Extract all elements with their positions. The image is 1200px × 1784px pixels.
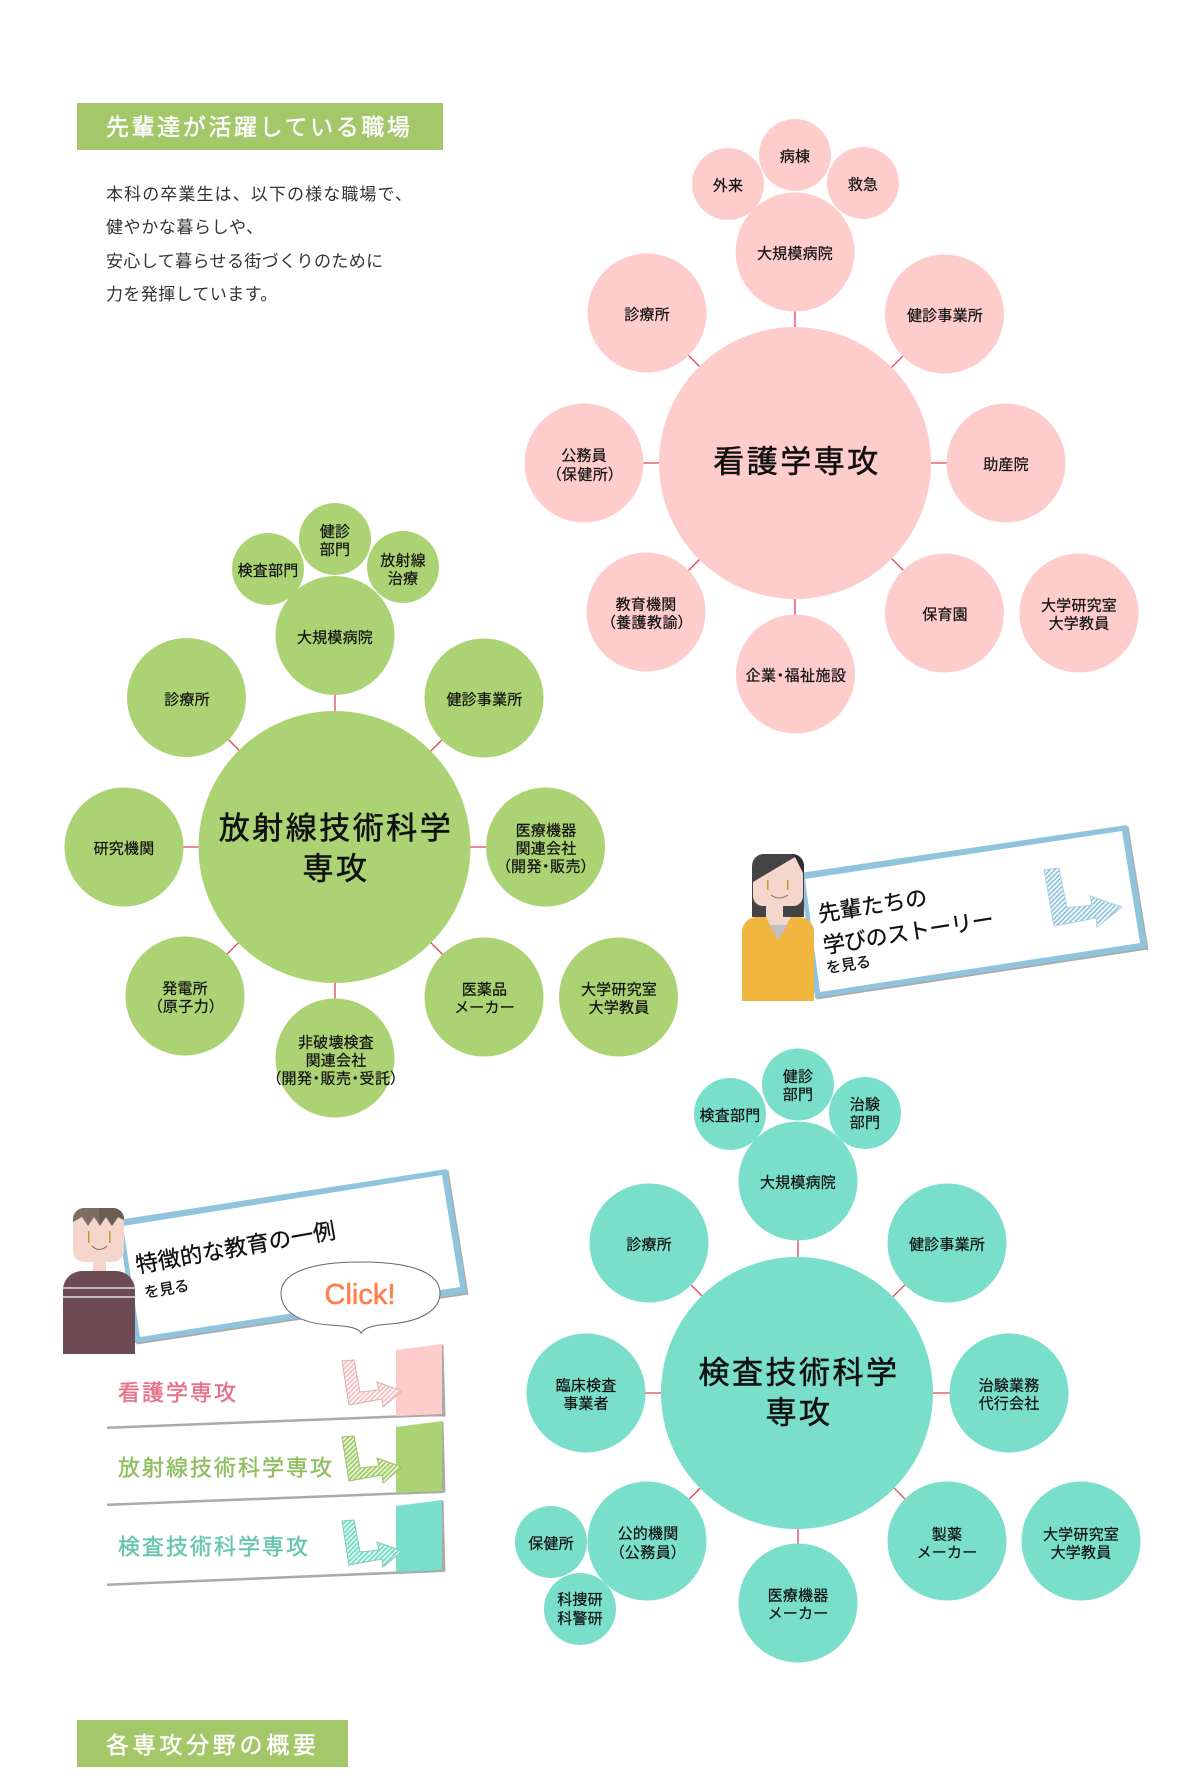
panel: 放射線技術科学専攻 diagram: 放射線技術科学: [219, 811, 453, 846]
callout: Click!: [281, 1262, 440, 1333]
panel: 看護学専攻 diagram: 看護学専攻: [713, 444, 881, 480]
panel: 検査技術科学専攻 diagram: 治験: [850, 1096, 880, 1114]
panel: 放射線技術科学専攻 diagram: 健診事業所: [446, 692, 523, 708]
panel: 看護学専攻 diagram: 公務員: [561, 448, 607, 464]
panel: 放射線技術科学専攻 diagram: 大学教員: [589, 1000, 649, 1016]
link row: 放射線技術科学専攻: [107, 1421, 446, 1506]
panel: 看護学専攻 diagram: 健診事業所: [907, 308, 983, 324]
text block: introduction: 力を発揮しています。: [106, 285, 278, 304]
text block: introduction: 安心して暮らせる街づくりのために: [106, 252, 384, 271]
panel: 検査技術科学専攻 diagram: [515, 1048, 1140, 1662]
heading: 先輩達が活躍している職場: 先輩達が活躍している職場: [106, 114, 413, 140]
link row: 看護学専攻: 看護学専攻: [118, 1380, 238, 1406]
panel: 放射線技術科学専攻 diagram: 非破壊検査: [298, 1034, 374, 1052]
heading: 先輩達が活躍している職場: [77, 103, 443, 150]
panel: 看護学専攻 diagram: 大学教員: [1049, 616, 1109, 632]
heading: 各専攻分野の概要: [77, 1720, 348, 1767]
panel: 検査技術科学専攻 diagram: 科警研: [557, 1610, 603, 1628]
text block: introduction: [106, 185, 413, 304]
panel: 検査技術科学専攻 diagram: 大規模病院: [760, 1174, 836, 1192]
text block: introduction: 本科の卒業生は、以下の様な職場で、: [106, 185, 413, 204]
panel: 検査技術科学専攻 diagram: メーカー: [768, 1606, 828, 1622]
panel: 看護学専攻 diagram: 教育機関: [616, 596, 676, 614]
panel: 放射線技術科学専攻 diagram: 部門: [320, 542, 350, 558]
panel: 検査技術科学専攻 diagram: 代行会社: [979, 1396, 1039, 1412]
panel: 検査技術科学専攻 diagram: 科捜研: [557, 1592, 603, 1608]
panel: 放射線技術科学専攻 diagram: 大学研究室: [581, 982, 657, 998]
panel: 看護学専攻 diagram: （養護教諭）: [608, 614, 686, 632]
panel: 放射線技術科学専攻 diagram: 検査部門: [238, 562, 298, 580]
card: 先輩たちの学びのストーリー: [800, 825, 1148, 1000]
icon: hatched arrow: [1044, 868, 1122, 927]
panel: 検査技術科学専攻 diagram: 臨床検査: [556, 1378, 616, 1394]
panel: 放射線技術科学専攻 diagram: 大規模病院: [297, 630, 373, 646]
panel: 検査技術科学専攻 diagram: メーカー: [917, 1544, 977, 1562]
icon: woman character: [742, 854, 814, 1001]
panel: 検査技術科学専攻 diagram: 検査技術科学: [698, 1356, 900, 1390]
panel: 看護学専攻 diagram: 診療所: [624, 306, 670, 324]
panel: 検査技術科学専攻 diagram: 保健所: [528, 1536, 574, 1552]
panel: 放射線技術科学専攻 diagram: （原子力）: [155, 998, 217, 1016]
link row: 検査技術科学専攻: [107, 1500, 446, 1586]
panel: 検査技術科学専攻 diagram: 公的機関: [618, 1526, 678, 1542]
panel: 検査技術科学専攻 diagram: 健診事業所: [909, 1236, 985, 1254]
card: 先輩たちの学びのストーリー: 先輩たちの: [816, 885, 929, 927]
panel: 検査技術科学専攻 diagram: 部門: [850, 1114, 880, 1132]
panel: 検査技術科学専攻 diagram: 健診: [783, 1068, 813, 1086]
panel: 看護学専攻 diagram: 助産院: [983, 456, 1029, 474]
panel: 看護学専攻 diagram: 大規模病院: [757, 246, 833, 262]
panel: 看護学専攻 diagram: [524, 119, 1138, 734]
card: 特徴的な教育の一例: を見る: [143, 1277, 190, 1302]
panel: 検査技術科学専攻 diagram: 医療機器: [768, 1588, 828, 1604]
card: 先輩たちの学びのストーリー: 学びのストーリー: [821, 907, 995, 958]
text block: introduction: 健やかな暮らしや、: [106, 218, 264, 237]
panel: 放射線技術科学専攻 diagram: メーカー: [454, 1000, 515, 1016]
heading: 各専攻分野の概要: 各専攻分野の概要: [106, 1732, 320, 1758]
panel: 放射線技術科学専攻 diagram: （開発・販売・受託）: [273, 1070, 399, 1088]
link row: 看護学専攻: [107, 1344, 446, 1429]
panel: 看護学専攻 diagram: 病棟: [780, 148, 810, 166]
panel: 放射線技術科学専攻 diagram: （開発・販売）: [503, 858, 589, 876]
panel: 放射線技術科学専攻 diagram: 治療: [388, 570, 418, 588]
panel: 看護学専攻 diagram: （保健所）: [554, 466, 616, 484]
panel: 放射線技術科学専攻 diagram: 発電所: [162, 980, 208, 998]
panel: 放射線技術科学専攻 diagram: [64, 503, 678, 1118]
panel: 看護学専攻 diagram: 企業・福祉施設: [745, 668, 847, 684]
panel: 放射線技術科学専攻 diagram: 診療所: [164, 692, 210, 708]
panel: 検査技術科学専攻 diagram: 専攻: [766, 1396, 832, 1430]
card: 先輩たちの学びのストーリー: を見る: [825, 953, 872, 977]
callout: Click!: Click!: [325, 1279, 395, 1311]
card: 特徴的な教育の一例: 特徴的な教育の一例: [134, 1218, 338, 1278]
panel: 放射線技術科学専攻 diagram: 放射線: [380, 552, 426, 570]
panel: 看護学専攻 diagram: 救急: [848, 176, 878, 194]
panel: 放射線技術科学専攻 diagram: 医薬品: [462, 982, 507, 998]
panel: 検査技術科学専攻 diagram: 大学研究室: [1043, 1526, 1119, 1544]
panel: 放射線技術科学専攻 diagram: 関連会社: [516, 840, 576, 858]
panel: 放射線技術科学専攻 diagram: 関連会社: [306, 1052, 366, 1070]
panel: 放射線技術科学専攻 diagram: 医療機器: [516, 822, 576, 840]
link row: 放射線技術科学専攻: 放射線技術科学専攻: [118, 1456, 334, 1480]
panel: 看護学専攻 diagram: 保育園: [922, 606, 968, 624]
panel: 放射線技術科学専攻 diagram: 健診: [320, 524, 350, 540]
link row: 検査技術科学専攻: 検査技術科学専攻: [118, 1534, 310, 1560]
panel: 検査技術科学専攻 diagram: 大学教員: [1051, 1544, 1111, 1562]
panel: 放射線技術科学専攻 diagram: 専攻: [302, 852, 370, 886]
panel: 検査技術科学専攻 diagram: 部門: [783, 1086, 813, 1104]
panel: 看護学専攻 diagram: 外来: [713, 178, 743, 194]
card: 特徴的な教育の一例: [118, 1169, 468, 1344]
panel: 検査技術科学専攻 diagram: 診療所: [626, 1236, 672, 1254]
icon: man character: [63, 1208, 135, 1354]
panel: 看護学専攻 diagram: 大学研究室: [1041, 598, 1117, 614]
panel: 検査技術科学専攻 diagram: 治験業務: [979, 1378, 1039, 1394]
panel: 検査技術科学専攻 diagram: 事業者: [563, 1396, 609, 1412]
panel: 放射線技術科学専攻 diagram: 研究機関: [94, 840, 154, 858]
panel: 検査技術科学専攻 diagram: 検査部門: [700, 1108, 760, 1124]
panel: 検査技術科学専攻 diagram: （公務員）: [617, 1544, 679, 1562]
panel: 検査技術科学専攻 diagram: 製薬: [932, 1526, 962, 1544]
